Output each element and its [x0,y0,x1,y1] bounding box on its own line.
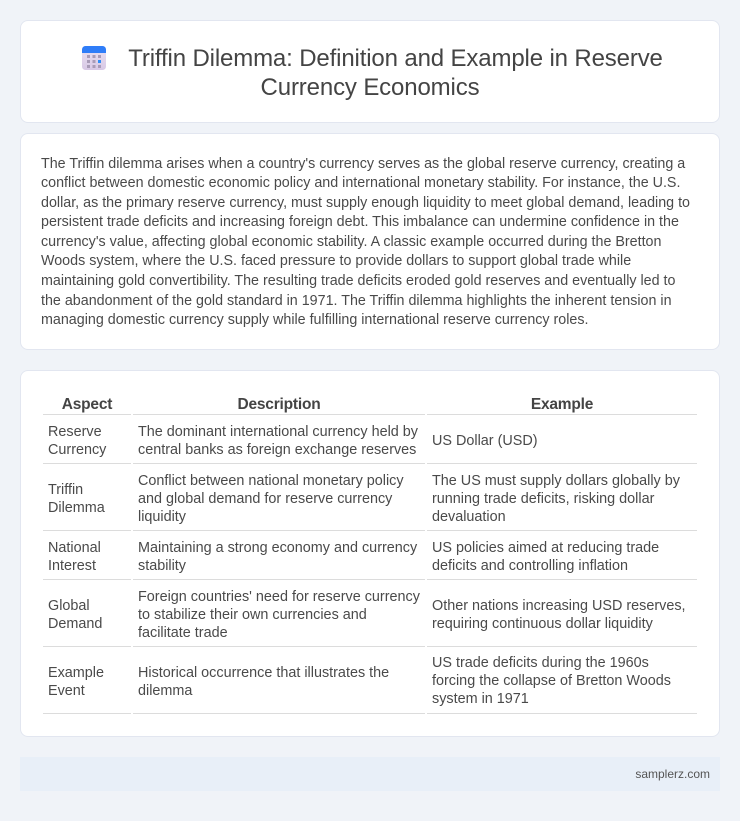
row: triffin dilemma: Dilemma [48,500,105,516]
row: reserve currency: Reserve [48,424,102,440]
row 1 example: US Dollar (USD) [432,433,538,449]
row 4 example: requiring continuous dollar liquidity [432,616,653,632]
intro paragraph: conflict between domestic economic policy and international monetary stability. For instance, the U.S. [41,175,680,191]
row: example event [48,665,104,699]
row 4 example [432,598,686,632]
intro paragraph: maintaining gold convertibility. The resulting trade deficits eroded gold reserves and eventually led to [41,273,675,289]
row 5 description: Historical occurrence that illustrates the [138,665,389,681]
intro paragraph: the abandonment of the gold standard in 1971. The Triffin dilemma highlights the inherent tension in [41,293,672,309]
intro paragraph: managing domestic currency supply while fulfilling international reserve currency roles. [41,312,589,328]
row 5 description [138,665,389,699]
row 1 description: The dominant international currency held by [138,424,418,440]
row 3 example: US policies aimed at reducing trade [432,540,659,556]
row: example event: Example [48,665,104,681]
row 3 description [138,540,418,574]
table header: example: Example [531,396,593,413]
row 4 description: Foreign countries' need for reserve currency [138,589,420,605]
intro paragraph: persistent trade deficits and increasing foreign debt. This imbalance can undermine confidence in the [41,214,679,230]
row 2 description [138,473,404,525]
row: national interest [48,540,101,574]
icon: calendar [82,46,106,70]
row 2 example: The US must supply dollars globally by [432,473,680,489]
row 4 description [138,589,420,641]
intro card [20,133,720,350]
row 2 description: Conflict between national monetary policy [138,473,404,489]
footer text: samplerz.com [635,767,710,781]
row 2 description: and global demand for reserve currency [138,491,392,507]
row: national interest: Interest [48,558,96,574]
row 5 example: US trade deficits during the 1960s [432,655,649,671]
row 1 description: central banks as foreign exchange reserves [138,442,416,458]
header card [20,20,720,123]
intro paragraph: Woods system, where the U.S. faced pressure to provide dollars to support global trade while [41,253,631,269]
row 3 example [432,540,659,574]
row 2 example: devaluation [432,509,506,525]
row 5 example: forcing the collapse of Bretton Woods [432,673,671,689]
table card [20,370,720,737]
row: reserve currency [48,424,106,458]
table header: aspect: Aspect [62,396,112,413]
title [128,45,663,101]
row 1 description [138,424,418,458]
row: triffin dilemma: Triffin [48,482,83,498]
row: reserve currency: Currency [48,442,106,458]
row 4 description: to stabilize their own currencies and [138,607,367,623]
table header: description: Description [237,396,321,413]
row 2 example [432,473,680,525]
row 2 description: liquidity [138,509,186,525]
row: example event: Event [48,683,85,699]
row: global demand: Demand [48,616,102,632]
intro paragraph [41,156,690,328]
title: Triffin Dilemma: Definition and Example in Reserve [128,45,663,72]
row 4 example: Other nations increasing USD reserves, [432,598,686,614]
row: triffin dilemma [48,482,105,516]
intro paragraph: dollar, as the primary reserve currency, must supply enough liquidity to meet global demand, leading to [41,195,690,211]
row 3 example: deficits and controlling inflation [432,558,628,574]
row 2 example: running trade deficits, risking dollar [432,491,654,507]
row 3 description: stability [138,558,186,574]
row 5 example [432,655,671,707]
row 4 description: facilitate trade [138,625,228,641]
title: Currency Economics [261,74,479,101]
row 5 example: system in 1971 [432,691,529,707]
intro paragraph: currency's value, affecting global economic stability. A classic example occurred during the Bretton [41,234,661,250]
row 5 description: dilemma [138,683,192,699]
footer bar [20,757,720,791]
row 3 description: Maintaining a strong economy and currency [138,540,417,556]
row: global demand: Global [48,598,90,614]
row: global demand [48,598,102,632]
row: national interest: National [48,540,101,556]
intro paragraph: The Triffin dilemma arises when a country's currency serves as the global reserve currency, creating a [41,156,685,172]
